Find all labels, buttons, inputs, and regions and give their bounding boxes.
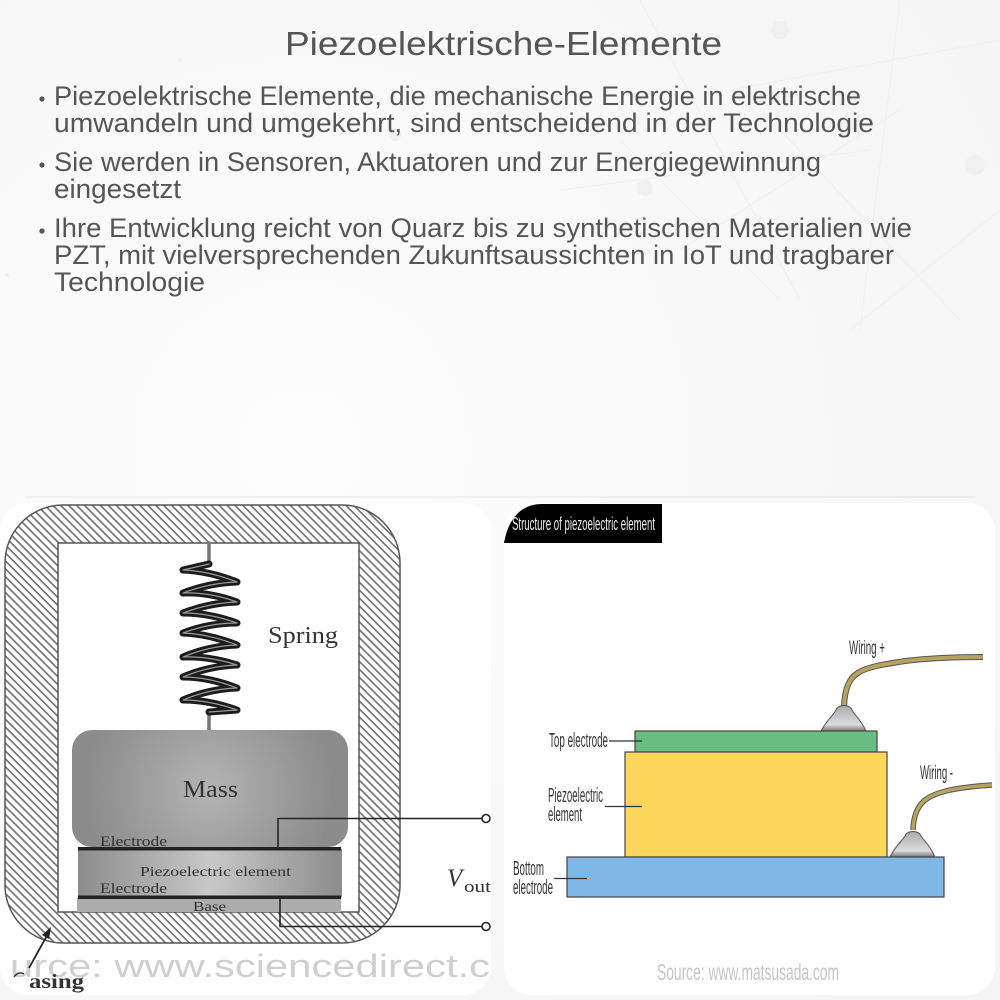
- label: Vout: V: [447, 865, 465, 892]
- panel: accelerometer diagram: [0, 503, 491, 995]
- source credit: Source: www.matsusada.com: [657, 959, 839, 985]
- bullet 3: Technologie: [54, 267, 205, 297]
- label: piezoelectric element: [548, 785, 642, 826]
- label: bottom electrode: Bottom: [513, 858, 544, 880]
- bullet 2: [39, 147, 821, 204]
- black heading label: Structure of piezoelectric element: [512, 514, 655, 534]
- piezoelectric element: [625, 752, 887, 857]
- black heading label: [504, 504, 662, 543]
- piezoelectric stack: Electrode: [100, 834, 167, 850]
- casing label and arrow: asing: [29, 971, 84, 993]
- wire plus: [821, 657, 983, 731]
- panel: structure diagram: [504, 503, 995, 995]
- label: piezoelectric element: element: [548, 804, 582, 826]
- casing label and arrow: [14, 927, 84, 993]
- bullet 3: [39, 213, 912, 297]
- bullet 3: Ihre Entwicklung reicht von Quarz bis zu synthetischen Materialien wie: [54, 213, 912, 243]
- bullet list: [39, 81, 912, 297]
- label: Vout: out: [464, 877, 491, 896]
- bottom electrode: [567, 857, 944, 897]
- bullet 1: Piezoelektrische Elemente, die mechanische Energie in elektrische: [54, 81, 861, 111]
- piezoelectric stack: Piezoelectric element: [140, 865, 291, 880]
- piezoelectric stack: [77, 834, 342, 915]
- label: bottom electrode: electrode: [513, 877, 553, 899]
- label: piezoelectric element: Piezoelectric: [548, 785, 603, 807]
- bullet 3: PZT, mit vielversprechenden Zukunftsaussichten in IoT und tragbarer: [54, 240, 894, 270]
- casing: [5, 505, 400, 943]
- bullet 1: [39, 81, 874, 138]
- top electrode: [635, 731, 877, 752]
- label: wiring plus: Wiring +: [849, 638, 885, 659]
- label: bottom electrode: [513, 858, 587, 899]
- bullet 2: Sie werden in Sensoren, Aktuatoren und zur Energiegewinnung: [54, 147, 821, 177]
- wire minus: [890, 785, 992, 857]
- label: spring: Spring: [268, 623, 338, 649]
- piezoelectric stack: Electrode: [100, 881, 167, 897]
- piezoelectric stack: Base: [193, 900, 226, 915]
- label: top electrode: Top electrode: [549, 730, 608, 752]
- bullet 1: umwandeln und umgekehrt, sind entscheidend in der Technologie: [54, 108, 874, 138]
- label: wiring minus: Wiring -: [920, 763, 953, 784]
- mass: [72, 730, 348, 847]
- spring: [183, 543, 237, 730]
- watermark: sciencedirect: urce: www.sciencedirect.c: [10, 948, 490, 984]
- mass: Mass: [183, 777, 238, 803]
- title: Piezoelektrische-Elemente: [285, 25, 722, 62]
- label: Vout: [447, 865, 491, 896]
- bullet 2: eingesetzt: [54, 174, 182, 204]
- output wires: [278, 814, 490, 930]
